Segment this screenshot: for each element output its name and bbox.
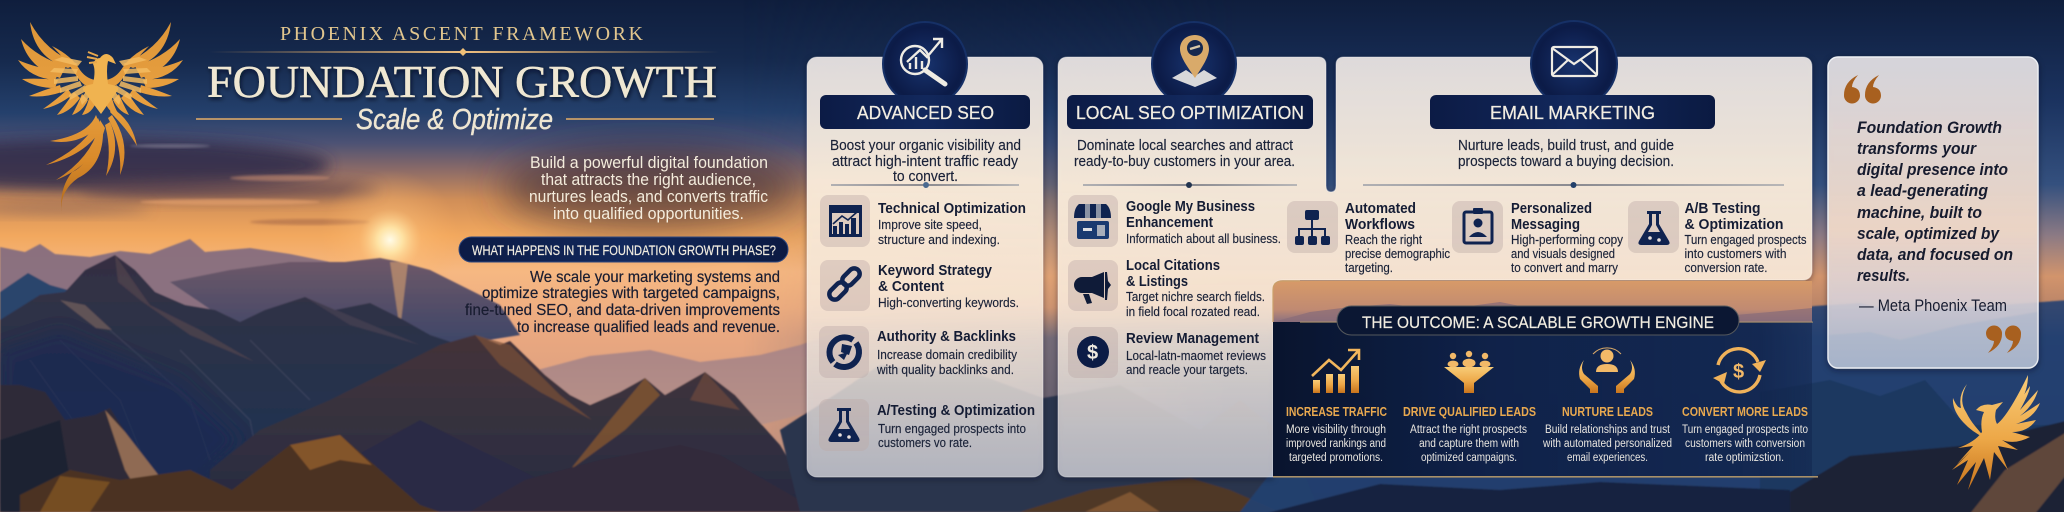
phase paragraph: to increase qualified leads and revenue. [517, 319, 780, 336]
divider [1363, 182, 1784, 188]
phase paragraph: We scale your marketing systems and [530, 269, 780, 286]
title bar [1067, 95, 1313, 129]
item: automated workflows: precise demographic [1345, 246, 1450, 261]
item: keyword strategy: High-converting keywords. [878, 295, 1019, 310]
title bar: ADVANCED SEO [857, 103, 994, 123]
outcome heading pill [1337, 306, 1739, 335]
item: local citations [1068, 258, 1265, 319]
close quote mark [1986, 325, 2021, 353]
subtitle: Scale & Optimize: Scale & Optimize [356, 104, 553, 136]
divider [1083, 182, 1297, 188]
open quote mark [1844, 75, 1881, 104]
item: a/testing [819, 399, 1035, 451]
phase paragraph [465, 269, 780, 336]
item: automated workflows: Workflows [1345, 217, 1415, 233]
item: a/b testing: into customers with [1684, 246, 1786, 261]
outcome: increase traffic: improved rankings and [1286, 438, 1386, 450]
item: keyword strategy: Keyword Strategy [878, 263, 992, 279]
item: automated workflows: Reach the right [1345, 232, 1422, 247]
quote text: digital presence into [1857, 160, 2008, 179]
phoenix emblem, large [18, 22, 183, 216]
item: personalized messaging: Personalized [1511, 201, 1592, 217]
outcome: drive qualified leads: optimized campaigns. [1421, 452, 1517, 464]
item: technical optimization: Technical Optimization [878, 201, 1026, 217]
pill heading: what happens: WHAT HAPPENS IN THE FOUNDATION GROWTH PHASE? [472, 243, 776, 258]
item: a/testing: Turn engaged prospects into [878, 421, 1026, 436]
item: google my business: Enhancement [1126, 215, 1213, 231]
description: Nurture leads, build trust, and guide [1458, 138, 1674, 154]
intro paragraph: into qualified opportunities. [553, 205, 744, 223]
panel: the outcome [1273, 281, 1818, 478]
phase paragraph: optimize strategies with targeted campaigns, [482, 285, 780, 302]
item: google my business: Google My Business [1126, 199, 1255, 215]
description: Boost your organic visibility and [830, 138, 1021, 154]
icon badge: envelope [1531, 21, 1617, 107]
quote text: machine, built to [1857, 203, 1982, 222]
quote attribution: — Meta Phoenix Team [1859, 297, 2007, 315]
title bar: EMAIL MARKETING [1490, 103, 1655, 123]
quote text: results. [1857, 266, 1910, 285]
phase paragraph: fine-tuned SEO, and data-driven improvements [465, 302, 780, 319]
quote text: data, and focused on [1857, 245, 2013, 264]
outcome: convert more leads: customers with conversion [1685, 438, 1805, 450]
item: authority and backlinks: Authority & Backlinks [877, 329, 1016, 345]
phoenix emblem, small [1952, 375, 2040, 490]
description [830, 138, 1021, 185]
item: google my business [1068, 195, 1281, 247]
item: a/b testing: conversion rate. [1684, 260, 1768, 275]
outcome: drive qualified leads: Attract the right prospects [1410, 424, 1527, 436]
item: technical optimization: Improve site speed, [878, 217, 982, 232]
icon badge: search analytics [883, 22, 967, 106]
item: personalized messaging: to convert and marry [1511, 260, 1618, 275]
title bar [820, 95, 1030, 129]
item: review management: $ [1087, 342, 1098, 364]
item: technical optimization [820, 195, 1026, 247]
outcome: convert more leads: $ [1733, 361, 1744, 383]
outcome: increase traffic [1286, 350, 1387, 464]
outcome: convert more leads: rate optimizstion. [1705, 452, 1784, 464]
item: automated workflows: Automated [1345, 201, 1416, 217]
item: review management: Local-latn-maomet reviews [1126, 348, 1266, 363]
outcome: increase traffic: INCREASE TRAFFIC [1286, 404, 1387, 419]
panel: Email Marketing [1287, 21, 1807, 275]
outcome: nurture leads: email experiences. [1567, 452, 1648, 464]
quote text [1857, 118, 2013, 285]
item: personalized messaging [1452, 201, 1623, 275]
item: a/b testing: & Optimization [1684, 217, 1784, 233]
panel: Local SEO and Email Marketing background [1058, 57, 1812, 477]
item: a/b testing: A/B Testing [1684, 201, 1760, 217]
item: automated workflows: targeting. [1345, 260, 1393, 275]
description [1458, 138, 1674, 170]
intro paragraph: nurtures leads, and converts traffic [529, 188, 768, 206]
outcome: drive qualified leads: and capture them with [1419, 438, 1519, 450]
outcome: nurture leads: with automated personalized [1542, 438, 1672, 450]
outcome: drive qualified leads [1403, 351, 1536, 464]
outcome: convert more leads [1682, 349, 1808, 464]
quote text: scale, optimized by [1857, 224, 2000, 243]
item: authority and backlinks: with quality backlinks and. [876, 362, 1014, 377]
description [1074, 138, 1295, 170]
item: authority and backlinks [819, 326, 1017, 378]
outcome: convert more leads: Turn engaged prospects into [1682, 424, 1808, 436]
icon badge: map pin [1152, 22, 1236, 106]
outcome: increase traffic: targeted promotions. [1289, 452, 1383, 464]
panel: Advanced SEO [807, 22, 1043, 477]
description: to convert. [893, 169, 958, 185]
description: prospects toward a buying decision. [1458, 154, 1674, 170]
title: Foundation Growth: FOUNDATION GROWTH [207, 56, 717, 107]
item: keyword strategy: & Content [878, 279, 944, 295]
quote text: Foundation Growth [1857, 118, 2002, 137]
item: automated workflows [1287, 201, 1450, 275]
panel: quote [1828, 57, 2038, 368]
description: attract high-intent traffic ready [832, 154, 1019, 170]
item: personalized messaging: Messaging [1511, 217, 1580, 233]
item: local citations: Target nichre search fields. [1126, 289, 1265, 304]
quote text: a lead-generating [1857, 181, 1989, 200]
item: personalized messaging: High-performing copy [1511, 232, 1623, 247]
item: a/b testing: Turn engaged prospects [1684, 232, 1807, 247]
item: a/testing: customers vo rate. [878, 435, 972, 450]
item: a/b testing [1628, 201, 1807, 275]
divider [831, 182, 1019, 188]
item: review management: Review Management [1126, 331, 1259, 347]
item: keyword strategy [820, 260, 1019, 311]
item: review management [1068, 327, 1266, 378]
item: local citations: Local Citations [1126, 258, 1220, 274]
outcome: nurture leads: Build relationships and trust [1545, 424, 1671, 436]
intro paragraph: that attracts the right audience, [541, 171, 756, 189]
quote text: transforms your [1857, 139, 1977, 158]
item: local citations: in field focal rozated read. [1126, 304, 1260, 319]
description: ready-to-buy customers in your area. [1074, 154, 1295, 170]
gold rule with diamond [209, 48, 719, 56]
outcome heading pill: THE OUTCOME: A SCALABLE GROWTH ENGINE [1362, 313, 1714, 332]
item: personalized messaging: and visuals designed [1511, 246, 1615, 261]
pill heading: what happens [459, 237, 788, 262]
panel: Local SEO Optimization [1067, 22, 1313, 378]
outcome: nurture leads: NURTURE LEADS [1562, 404, 1653, 419]
item: technical optimization: structure and indexing. [878, 232, 1000, 247]
item: review management: and reacle your targets. [1126, 362, 1248, 377]
item: authority and backlinks: Increase domain credibility [877, 347, 1017, 362]
outcome: convert more leads: CONVERT MORE LEADS [1682, 404, 1808, 419]
description: Dominate local searches and attract [1077, 138, 1293, 154]
outcome: increase traffic: More visibility through [1286, 424, 1386, 436]
title bar [1430, 95, 1715, 129]
item: google my business: Informatich about all business. [1126, 231, 1281, 246]
item: a/testing: A/Testing & Optimization [877, 403, 1035, 419]
intro paragraph [529, 154, 768, 223]
outcome: drive qualified leads: DRIVE QUALIFIED LEADS [1403, 404, 1536, 419]
title bar: LOCAL SEO OPTIMIZATION [1076, 103, 1304, 123]
intro paragraph: Build a powerful digital foundation [530, 154, 768, 172]
outcome: nurture leads [1542, 348, 1672, 464]
item: local citations: & Listings [1126, 274, 1188, 290]
eyebrow: Phoenix Ascent Framework: PHOENIX ASCENT FRAMEWORK [280, 23, 644, 45]
